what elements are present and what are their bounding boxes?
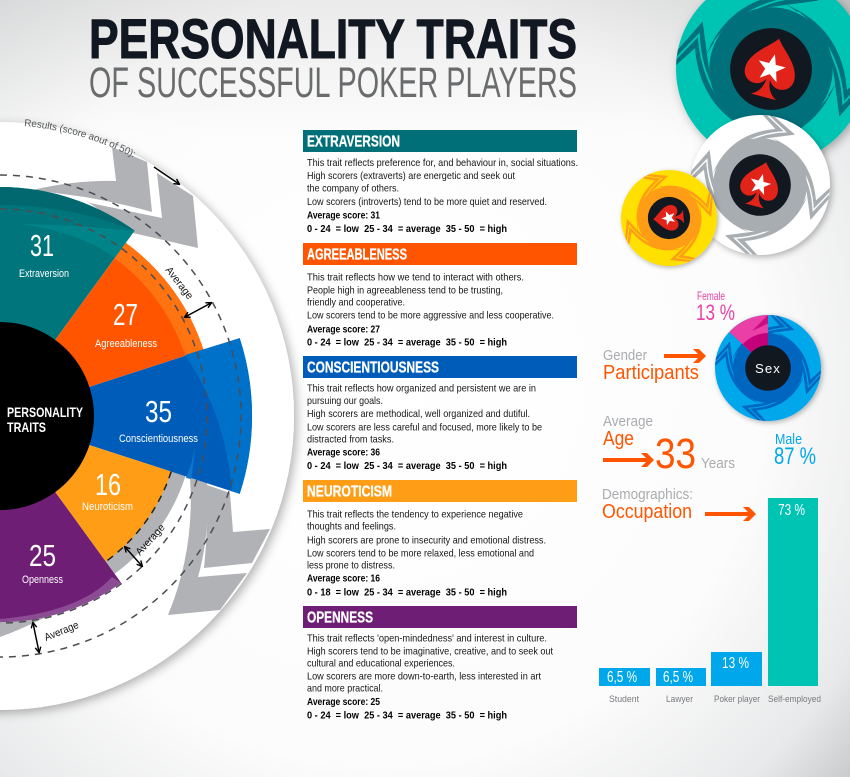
segment: neuroticism	[0, 416, 171, 562]
score labels: 35	[145, 394, 172, 429]
centre label: PERSONALITY	[7, 404, 83, 420]
title	[89, 7, 577, 107]
male share label: Male	[775, 431, 802, 448]
score labels: Agreeableness	[95, 338, 157, 350]
poker chip: yellow	[620, 168, 721, 270]
average age: 33	[655, 430, 696, 478]
title: PERSONALITY TRAITS	[89, 7, 577, 70]
bar: lawyer: 6,5 %	[663, 669, 693, 686]
arrow: gender	[664, 349, 706, 363]
score labels: 25	[29, 538, 56, 573]
panel: agreeableness: 0 - 24 = low 25 - 34 = average 35 - 50 = high	[307, 336, 507, 348]
panel: neuroticism: less prone to distress.	[307, 560, 395, 572]
average dashed rings	[0, 175, 241, 657]
panel: conscientiousness: 0 - 24 = low 25 - 34 = average 35 - 50 = high	[307, 460, 507, 472]
panel: conscientiousness: High scorers are methodical, well organized and dutiful.	[307, 408, 530, 420]
grey score band	[105, 471, 186, 574]
panel: agreeableness: Low scorers tend to be more aggressive and less cooperative.	[307, 310, 554, 322]
panel: agreeableness: Average score: 27	[307, 324, 380, 336]
bar: student: 6,5 %	[607, 669, 637, 686]
panel: neuroticism: NEUROTICISM	[307, 484, 392, 500]
grey chevrons bottom	[168, 478, 270, 615]
gender heading: Gender	[603, 347, 647, 364]
arrow: occupation	[705, 507, 756, 521]
score labels: 16	[95, 467, 121, 502]
panel: conscientiousness: pursuing our goals.	[307, 395, 383, 407]
average labels and arrows: Average	[43, 619, 81, 644]
segment: openness	[0, 416, 121, 622]
panel: extraversion: High scorers (extraverts) are energetic and seek out	[307, 170, 515, 182]
centre label: TRAITS	[7, 419, 46, 435]
panel: extraversion: EXTRAVERSION	[307, 134, 400, 150]
panel: extraversion: This trait reflects preference for, and behaviour in, social situations.	[307, 157, 578, 169]
female share label: Female	[697, 289, 725, 303]
panel: extraversion: Average score: 31	[307, 210, 380, 222]
panel: openness: and more practical.	[307, 682, 383, 694]
female share label: 13 %	[696, 300, 735, 325]
panel: conscientiousness: CONSCIENTIOUSNESS	[307, 360, 439, 376]
bar: self-employed: 73 %	[778, 502, 805, 519]
poker chip: teal	[676, 0, 850, 164]
panel: agreeableness	[303, 243, 577, 348]
arrow: age	[603, 453, 654, 467]
bar: poker player: 13 %	[722, 655, 749, 672]
average labels and arrows	[33, 167, 211, 652]
panel: neuroticism: 0 - 18 = low 25 - 34 = average 35 - 50 = high	[307, 586, 507, 598]
bar: lawyer	[656, 668, 706, 705]
female share label	[696, 289, 735, 325]
score labels: Openness	[22, 574, 63, 586]
panel: conscientiousness: distracted from tasks.	[307, 434, 394, 446]
panel: openness: This trait reflects 'open-mindedness' and interest in culture.	[307, 632, 547, 644]
sex donut chip: Sex	[755, 361, 781, 376]
results caption: Results (score aout of 50):	[24, 119, 136, 158]
bar: student: Student	[609, 694, 639, 705]
segment: extraversion	[0, 187, 135, 416]
score labels: Extraversion	[19, 268, 69, 280]
panel: extraversion	[303, 130, 578, 235]
segment: agreeableness	[0, 243, 204, 416]
bar: poker player: Poker player	[714, 694, 760, 705]
panel: openness: Average score: 25	[307, 696, 380, 708]
score labels: Conscientiousness	[119, 433, 198, 445]
score labels: Neuroticism	[82, 501, 133, 513]
score labels: 31	[30, 228, 54, 263]
bar: student	[599, 668, 650, 705]
panel: openness: OPENNESS	[307, 610, 373, 626]
white disc	[0, 122, 294, 710]
grey chevrons top	[33, 147, 198, 248]
panel: neuroticism: Low scorers tend to be more relaxed, less emotional and	[307, 548, 534, 560]
average age: Years	[701, 455, 735, 472]
bar: lawyer: Lawyer	[666, 694, 693, 705]
score labels: 27	[113, 297, 138, 332]
panel: openness	[303, 606, 577, 722]
panel: conscientiousness: Low scorers are less careful and focused, more likely to be	[307, 422, 542, 434]
gender heading	[603, 347, 699, 384]
occupation chart	[599, 486, 821, 705]
bar: poker player	[711, 652, 762, 705]
panel: extraversion: the company of others.	[307, 182, 399, 194]
panel: extraversion: Low scorers (introverts) tend to be more quiet and reserved.	[307, 196, 547, 208]
panel: neuroticism: High scorers are prone to insecurity and emotional distress.	[307, 534, 546, 546]
panel: neuroticism: Average score: 16	[307, 572, 380, 584]
panel: agreeableness: friendly and cooperative.	[307, 296, 405, 308]
panel: openness: 0 - 24 = low 25 - 34 = average 35 - 50 = high	[307, 710, 507, 722]
bar: self-employed	[768, 498, 821, 705]
panel: conscientiousness	[303, 356, 577, 472]
panel: agreeableness: People high in agreeableness tend to be trusting,	[307, 284, 503, 296]
average age	[603, 413, 735, 478]
panel: openness: cultural and educational experiences.	[307, 658, 455, 670]
panel: extraversion: 0 - 24 = low 25 - 34 = average 35 - 50 = high	[307, 223, 507, 235]
panel: neuroticism	[303, 480, 577, 598]
average age: Average	[603, 413, 653, 430]
panel: openness: High scorers tend to be imaginative, creative, and to seek out	[307, 646, 553, 658]
panel: conscientiousness: This trait reflects how organized and persistent we are in	[307, 382, 536, 394]
average labels and arrows: Average	[163, 264, 196, 302]
occupation heading: Demographics:	[602, 486, 693, 503]
panel: neuroticism: thoughts and feelings.	[307, 520, 396, 532]
title: OF SUCCESSFUL POKER PLAYERS	[89, 59, 577, 107]
gender participants	[603, 289, 821, 470]
gender heading: Participants	[603, 362, 699, 384]
sex donut chip	[715, 315, 821, 421]
panel: neuroticism: This trait reflects the tendency to experience negative	[307, 508, 523, 520]
grey score tail	[0, 600, 60, 637]
segment: conscientiousness	[0, 338, 252, 494]
score labels	[19, 228, 198, 586]
average age: Age	[603, 428, 634, 450]
panel: agreeableness: AGREEABLENESS	[307, 246, 407, 264]
male share label: 87 %	[774, 443, 816, 470]
poker chip: white	[690, 115, 830, 255]
centre label	[7, 404, 83, 435]
panel: conscientiousness: Average score: 36	[307, 446, 380, 458]
male share label	[774, 431, 816, 470]
centre circle	[0, 322, 94, 510]
occupation heading	[602, 486, 693, 523]
bar: self-employed: Self-employed	[768, 694, 821, 705]
panel: openness: Low scorers are more down-to-earth, less interested in art	[307, 670, 541, 682]
occupation heading: Occupation	[602, 501, 692, 523]
panel: agreeableness: This trait reflects how we tend to interact with others.	[307, 272, 524, 284]
average labels and arrows: Average	[133, 522, 168, 558]
wheel chart: trait scores	[0, 119, 303, 718]
